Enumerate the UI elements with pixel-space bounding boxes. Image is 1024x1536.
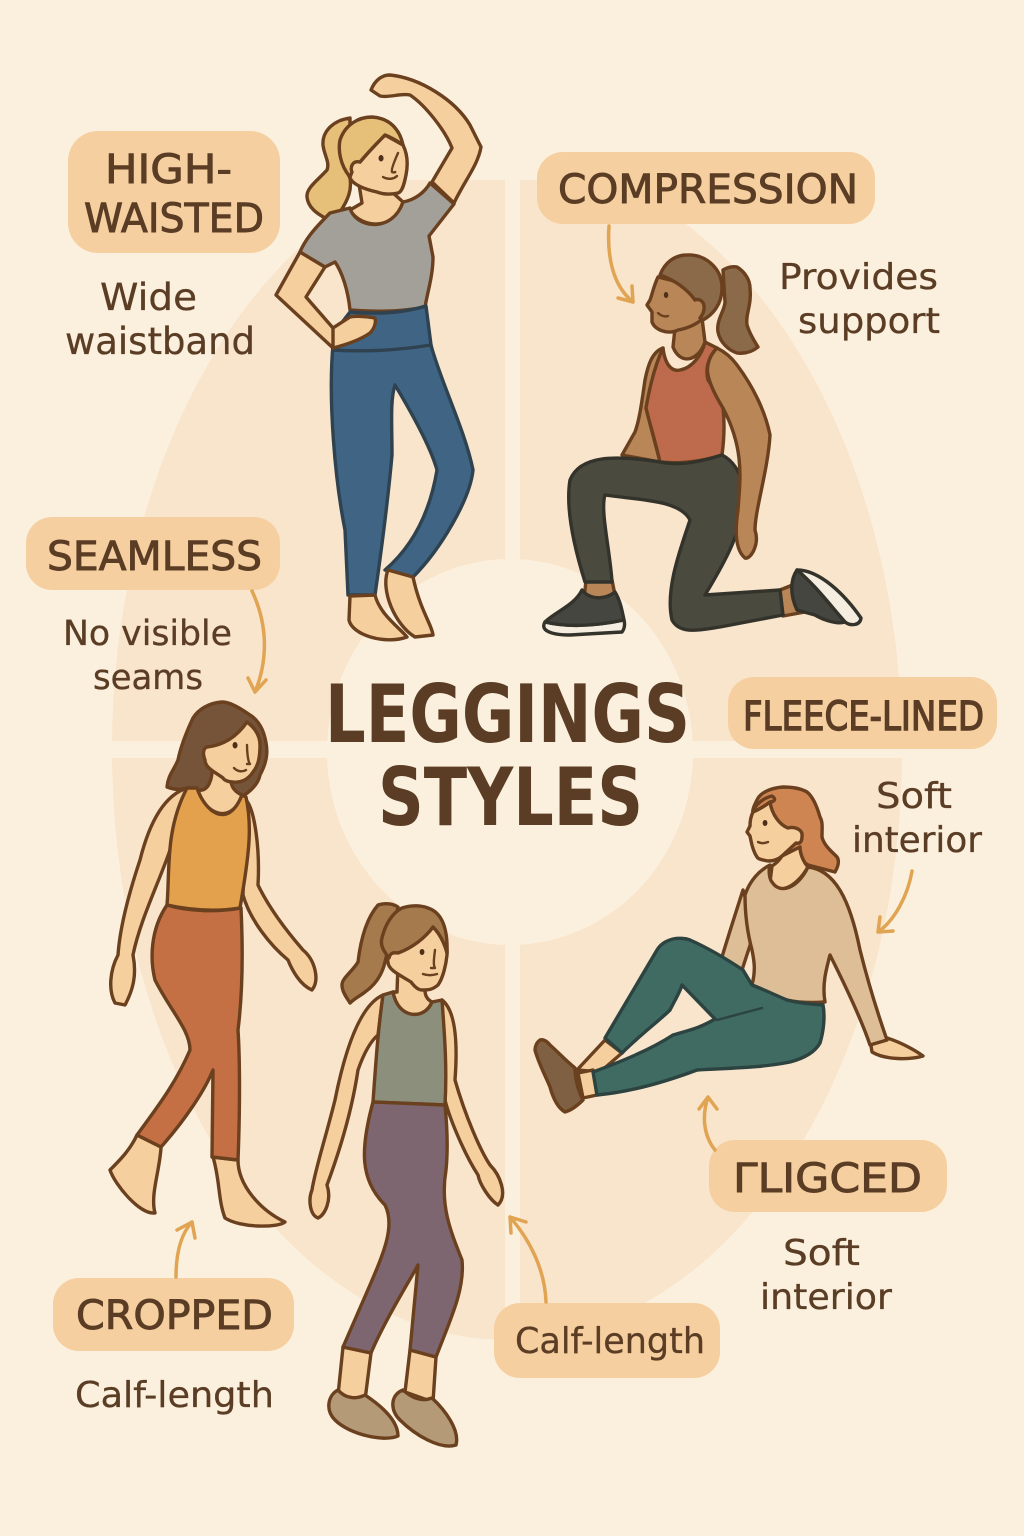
label: garbled ribbed: ΓLIGCED [733, 1156, 922, 1202]
arrow: garbled ribbed [699, 1097, 717, 1150]
figure: compression [544, 255, 861, 635]
text: soft interior upper [852, 776, 982, 861]
arrow: seamless [248, 591, 266, 692]
arrow: cropped [176, 1222, 195, 1277]
title [325, 668, 690, 844]
text: soft interior lower [760, 1233, 892, 1318]
label: high-waisted: HIGH- [105, 147, 232, 193]
label: calf-length: Calf-length [515, 1321, 705, 1362]
text: soft interior lower: Soft [783, 1233, 860, 1274]
title: STYLES [378, 751, 643, 844]
label: seamless: SEAMLESS [47, 534, 262, 580]
title: LEGGINGS [325, 668, 690, 761]
label: cropped [53, 1278, 294, 1351]
arrow: soft interior [878, 871, 912, 932]
label: fleece-lined [728, 677, 997, 749]
text: wide waistband: Wide [100, 276, 197, 319]
background quartered ring [100, 160, 910, 1350]
text: calf-length left: Calf-length [75, 1375, 274, 1416]
label: fleece-lined: FLEECE-LINED [743, 694, 984, 740]
text: provides support: support [798, 301, 940, 342]
text: no visible seams: No visible [63, 614, 232, 654]
text: provides support [779, 257, 940, 342]
figure: fleece-lined seated [535, 787, 923, 1112]
figure: seamless [110, 702, 316, 1226]
label: high-waisted [68, 131, 280, 253]
text: soft interior upper: Soft [876, 776, 952, 817]
label: compression: COMPRESSION [558, 167, 858, 213]
label: calf-length [494, 1303, 720, 1378]
label: high-waisted: WAISTED [84, 196, 264, 242]
figure: high-waisted [276, 75, 481, 640]
arrow: calf-length [510, 1217, 546, 1302]
text: no visible seams [63, 614, 232, 698]
text: wide waistband: waistband [65, 320, 255, 363]
label: compression [537, 152, 875, 224]
text: wide waistband [65, 276, 255, 363]
label: cropped: CROPPED [76, 1293, 273, 1339]
label: seamless [26, 517, 280, 590]
arrow: compression [609, 226, 633, 302]
text: provides support: Provides [779, 257, 938, 298]
text: no visible seams: seams [93, 658, 203, 698]
text: soft interior upper: interior [852, 820, 982, 861]
figure: cropped centre walker [310, 904, 503, 1446]
text: soft interior lower: interior [760, 1277, 892, 1318]
label: garbled ribbed [709, 1140, 947, 1212]
